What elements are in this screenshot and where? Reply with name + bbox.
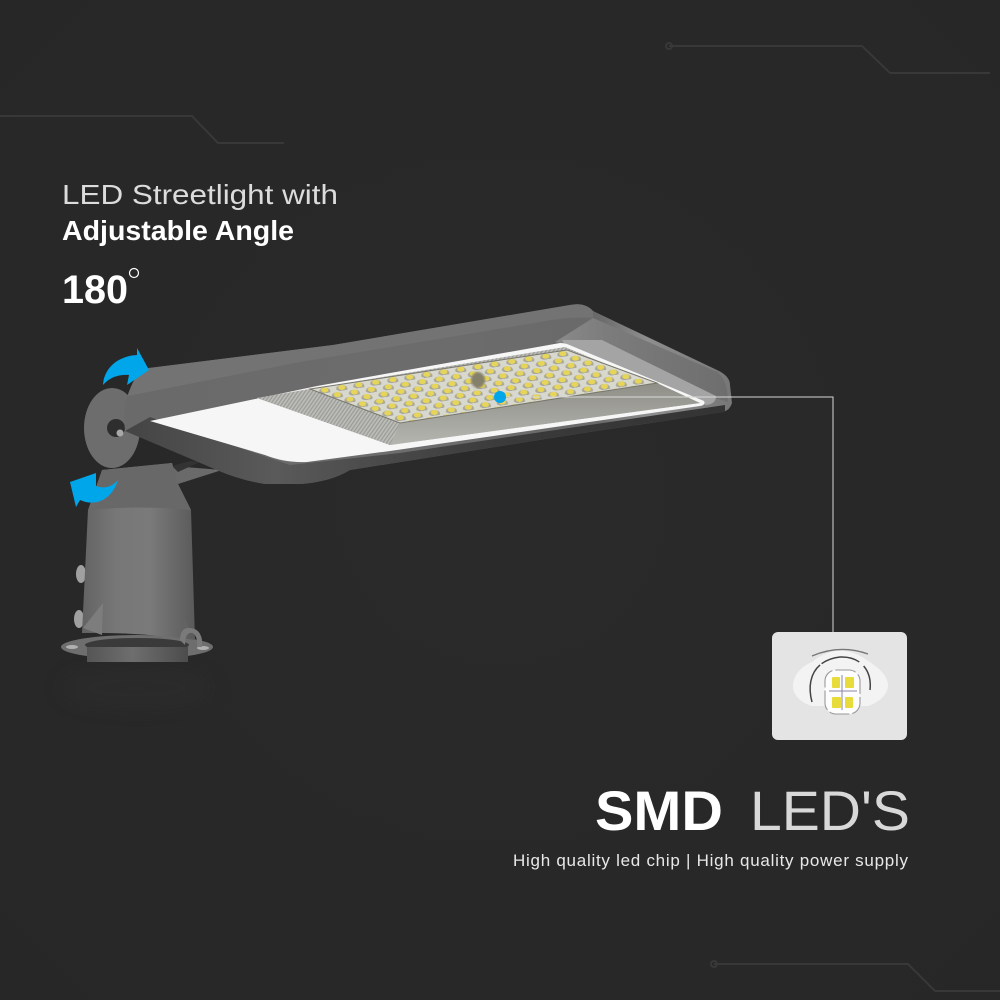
callout dot [494,391,506,403]
lamp: right side face [555,318,728,402]
lamp: center sensor [471,372,485,388]
lamp: housing [124,304,732,484]
LED chip cells [832,677,854,708]
callout connector line [500,397,833,632]
lamp: lens outer [257,347,700,445]
title: SMD LED'S: LED'S [750,779,910,842]
side bolts [76,565,86,583]
lamp: white diffuser panel [150,343,704,462]
product: LED street light [61,304,732,706]
mount: pole adapter [61,463,213,662]
angle value: 180 degrees: 180 [62,268,128,312]
title: SMD LED'S: SMD [595,779,723,842]
floor reflection [62,670,212,706]
heading: LED Streetlight with Adjustable Angle: Adjustable Angle [62,215,294,246]
flange [61,635,213,659]
lamp: LED board [310,350,657,423]
LED chip close-up card [772,632,907,740]
body [82,463,195,640]
rotation arrow: lower [70,473,118,507]
heading: LED Streetlight with Adjustable Angle [62,179,338,246]
LED chip lens [793,649,888,714]
lamp: inner light trim [562,340,716,405]
title: SMD LED'S [595,779,910,842]
rotation arrow: upper [103,348,149,385]
heading: LED Streetlight with Adjustable Angle: LED Streetlight with [62,179,338,210]
mount: pivot disc [84,388,140,468]
lamp: dark under-rim [125,405,725,484]
mount: support struts [170,466,222,484]
lamp: upper ridge [128,304,593,396]
subtitle: High quality led chip | High quality power supply [513,851,908,870]
